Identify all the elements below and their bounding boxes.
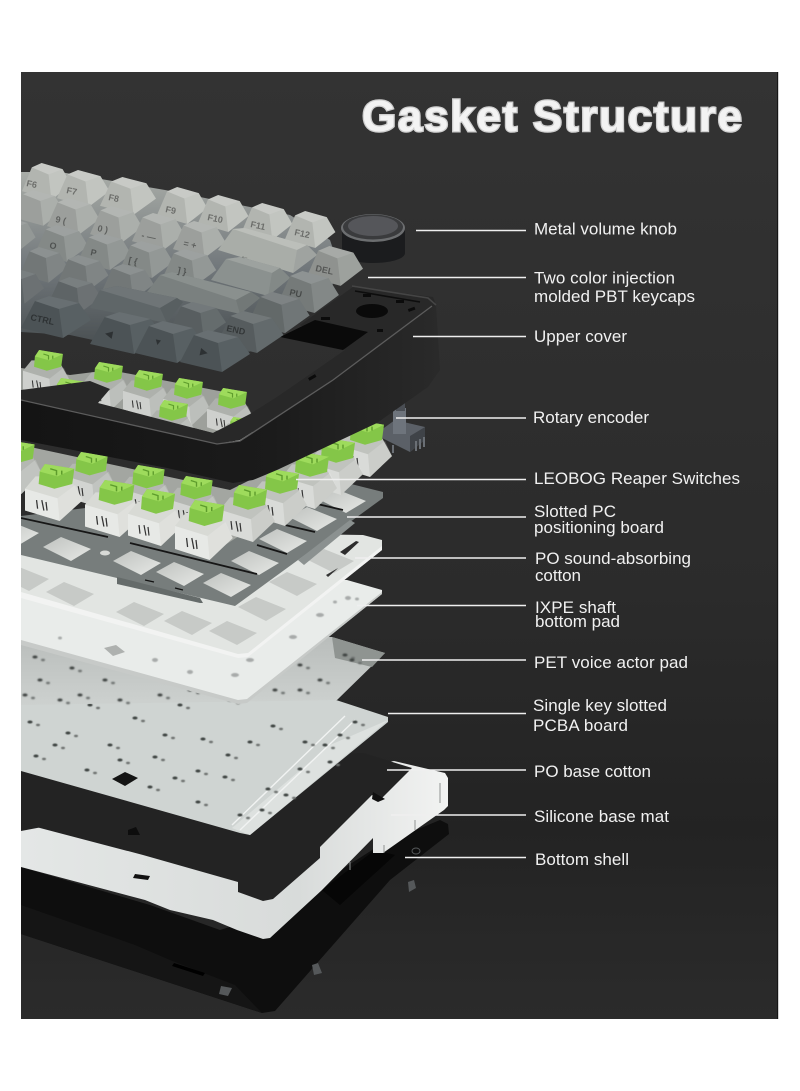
- keycap legends: F8: [108, 192, 120, 204]
- callout: PO sound-absorbing cotton: cotton: [535, 566, 581, 585]
- keycap legends: [ {: [128, 255, 139, 267]
- PET spot pattern: [22, 654, 362, 704]
- layer: IXPE shaft bottom pad: [21, 575, 382, 704]
- keycap legends: O: [49, 240, 58, 251]
- callout: keycaps: [368, 268, 695, 306]
- layer: PO base cotton: [21, 753, 412, 901]
- keycap legends: P: [90, 247, 98, 258]
- keycap legends: F11: [250, 219, 266, 232]
- keycap legends: 9 (: [55, 214, 67, 226]
- switch bed backing: [33, 440, 341, 544]
- fifth key row: [21, 270, 310, 334]
- keycap legends: 0 ): [97, 223, 109, 235]
- callout: IXPE shaft bottom pad: bottom pad: [535, 612, 620, 631]
- back switch row: [21, 442, 217, 520]
- switches visible through the cover opening: [21, 350, 255, 448]
- function key row: [22, 163, 336, 248]
- keycap legends: ] }: [177, 265, 188, 277]
- keycap legends: PU: [289, 287, 303, 300]
- layer: bottom shell: [21, 820, 449, 1013]
- layer: PET voice actor pad: [21, 630, 385, 705]
- front switch row: [25, 464, 233, 560]
- callout: PCBA board: Single key slotted: [533, 696, 667, 715]
- callout: PCBA board: PCBA board: [533, 716, 628, 735]
- keycap legends: ←: [240, 250, 250, 262]
- callout: PCBA board: [388, 696, 667, 735]
- keycap legends: F9: [165, 204, 177, 216]
- keycap legends: END: [226, 323, 247, 337]
- callout: rotary encoder: Rotary encoder: [533, 408, 649, 427]
- callout: keycaps: molded PBT keycaps: [534, 287, 695, 306]
- keycap legends: F7: [66, 185, 78, 197]
- keycap legends: [26, 178, 335, 358]
- keycap legends: = +: [183, 238, 197, 251]
- third key row: [21, 221, 363, 295]
- layer: single key slotted PCBA board: [21, 700, 388, 835]
- layer: PO sound-absorbing cotton: [1, 530, 382, 658]
- keycap legends: ▼: [153, 336, 163, 348]
- keycap backing: [21, 172, 333, 352]
- layer: upper cover: [21, 286, 440, 483]
- callout: PO base cotton: PO base cotton: [534, 762, 651, 781]
- callout: silicone base mat: Silicone base mat: [534, 807, 669, 826]
- keycap legends: F10: [207, 212, 224, 225]
- keycap legends: DEL: [315, 263, 335, 277]
- metal volume knob: [341, 214, 405, 263]
- LEOBOG Reaper switches: [0, 420, 392, 560]
- layer: slotted PC positioning board: [0, 483, 383, 606]
- PC board cutouts: [0, 489, 366, 597]
- two color PBT keycaps: [0, 157, 363, 372]
- keycap legends: ▶: [199, 346, 209, 358]
- callout: upper cover: Upper cover: [534, 327, 627, 346]
- layer: silicone base mat: [21, 761, 448, 939]
- knob opening: [356, 304, 388, 318]
- callout: PET voice actor pad: PET voice actor pad: [534, 653, 688, 672]
- callout: keycaps: Two color injection: [534, 268, 675, 288]
- cover screen window: [280, 320, 368, 350]
- callout: slotted PC board: Slotted PC: [534, 502, 616, 521]
- callout: bottom shell: Bottom shell: [535, 850, 629, 869]
- keycap legends: F6: [26, 178, 38, 190]
- PCBA solder points: [27, 704, 365, 819]
- bottom key row: [21, 296, 284, 372]
- keycap legends: CTRL: [30, 312, 56, 327]
- title: Gasket Structure: [362, 92, 742, 141]
- rotary encoder: [382, 404, 425, 453]
- keycap legends: - —: [141, 230, 157, 243]
- callout: metal volume knob: Metal volume knob: [534, 220, 677, 238]
- keycap legends: F12: [294, 227, 311, 240]
- callout: IXPE shaft bottom pad: [357, 598, 620, 631]
- keycap legends: ◀: [104, 328, 114, 340]
- callout: LEOBOG Reaper switches: LEOBOG Reaper Switches: [534, 469, 740, 488]
- exploded keyboard illustration: [0, 157, 449, 1013]
- callout: PO sound-absorbing cotton: [355, 549, 691, 585]
- callout: PO sound-absorbing cotton: PO sound-absorbing: [535, 549, 691, 568]
- number key row: [21, 192, 316, 273]
- right switch row: [220, 420, 392, 542]
- callout: slotted PC board: [347, 502, 664, 537]
- callout: IXPE shaft bottom pad: IXPE shaft: [535, 598, 616, 617]
- callout: slotted PC board: positioning board: [534, 518, 664, 537]
- fourth key row: [20, 247, 339, 314]
- opening backing: [21, 368, 221, 433]
